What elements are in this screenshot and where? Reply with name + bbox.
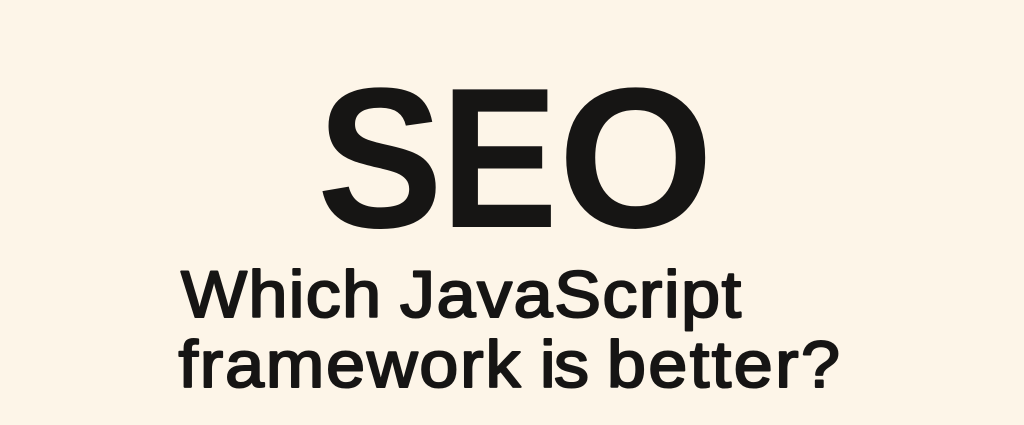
title: SEO: E <box>441 46 558 270</box>
title: SEO <box>317 46 714 270</box>
title: SEO: O <box>558 47 714 270</box>
subtitle line 1 <box>181 258 741 332</box>
subtitle line 1: JavaScript <box>400 258 741 332</box>
title: SEO: S <box>317 47 443 270</box>
subtitle line 1: Which <box>181 258 381 332</box>
subtitle line 2: is <box>540 328 589 402</box>
subtitle line 2 <box>179 328 840 402</box>
subtitle line 2: better? <box>607 328 840 402</box>
subtitle line 2: framework <box>179 328 521 402</box>
subtitle block <box>179 258 840 402</box>
